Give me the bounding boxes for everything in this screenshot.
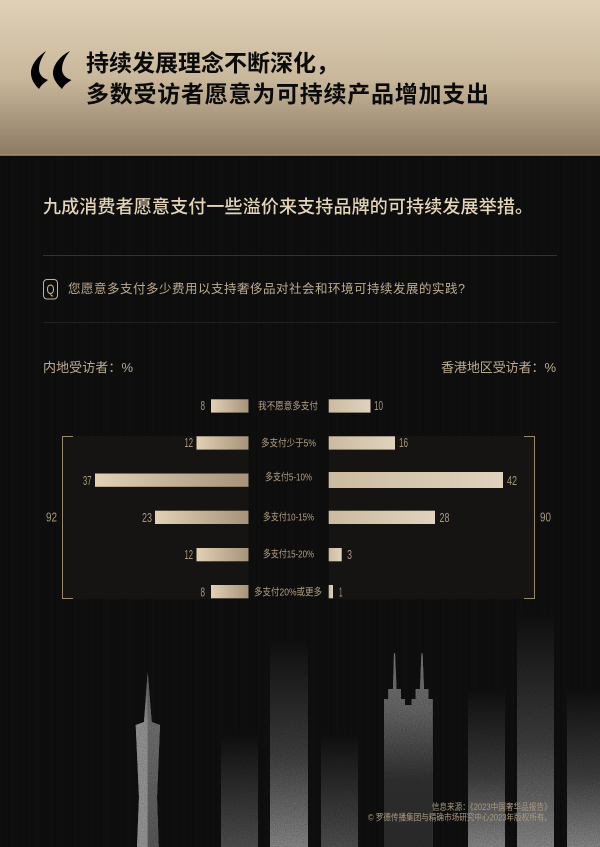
bar chart: mainland: 23 <box>142 510 152 525</box>
bar chart: Hong Kong: 10 <box>374 398 383 413</box>
bar chart: mainland: 8 <box>200 398 205 413</box>
bar chart: Hong Kong: 42 <box>507 473 517 488</box>
icon: quotation mark <box>31 51 72 89</box>
question <box>44 280 465 299</box>
total: mainland 92: 92 <box>46 510 57 524</box>
bar chart: mainland: 12 <box>184 435 193 450</box>
category labels: 我不愿意多支付 <box>258 400 318 412</box>
header band <box>0 0 600 156</box>
category labels: 多支付10-15% <box>263 510 314 524</box>
panel: mainland bracket <box>46 436 248 599</box>
bar chart: Hong Kong: 1 <box>339 584 342 600</box>
divider bottom <box>43 322 557 323</box>
bar chart: Hong Kong <box>329 398 517 600</box>
legend: mainland respondents: 内地受访者：% <box>43 360 133 375</box>
bar chart: mainland: 37 <box>83 473 92 488</box>
source note: 信息来源：《2023中国奢华品报告》 <box>432 801 552 812</box>
subtitle: 九成消费者愿意支付一些溢价来支持品牌的可持续发展举措。 <box>43 197 533 217</box>
icon: Canton Tower <box>136 672 160 847</box>
source note <box>368 801 552 822</box>
category labels <box>254 400 322 598</box>
category labels: 多支付20%或更多 <box>254 586 322 598</box>
bar chart: mainland <box>83 398 248 600</box>
legend: Hong Kong respondents: 香港地区受访者：% <box>441 360 556 375</box>
category labels: 多支付少于5% <box>261 436 316 450</box>
category labels: 多支付5-10% <box>265 470 312 484</box>
total: Hong Kong 90: 90 <box>540 510 551 524</box>
bar chart: mainland: 8 <box>200 584 205 600</box>
title: 持续发展理念不断深化， <box>86 50 339 76</box>
bar chart: mainland: 12 <box>184 547 193 562</box>
icon: Q badge <box>44 280 58 299</box>
divider top <box>43 255 557 256</box>
source note: © 罗德传播集团与精确市场研究中心2023年版权所有。 <box>368 812 552 822</box>
bar chart: Hong Kong: 28 <box>440 510 450 525</box>
bar chart: Hong Kong: 3 <box>347 547 352 562</box>
icon: twin-spire skyscraper <box>384 653 433 847</box>
bar chart: Hong Kong: 16 <box>399 435 408 450</box>
title: 多数受访者愿意为可持续产品增加支出 <box>86 81 489 107</box>
icon: Q badge: Q <box>46 281 55 297</box>
skyline <box>136 615 600 847</box>
title <box>86 50 489 107</box>
category labels: 多支付15-20% <box>263 548 314 560</box>
panel: Hong Kong bracket <box>329 436 551 599</box>
question text: 您愿意多支付多少费用以支持奢侈品对社会和环境可持续发展的实践? <box>68 281 465 296</box>
background towers <box>221 615 600 847</box>
